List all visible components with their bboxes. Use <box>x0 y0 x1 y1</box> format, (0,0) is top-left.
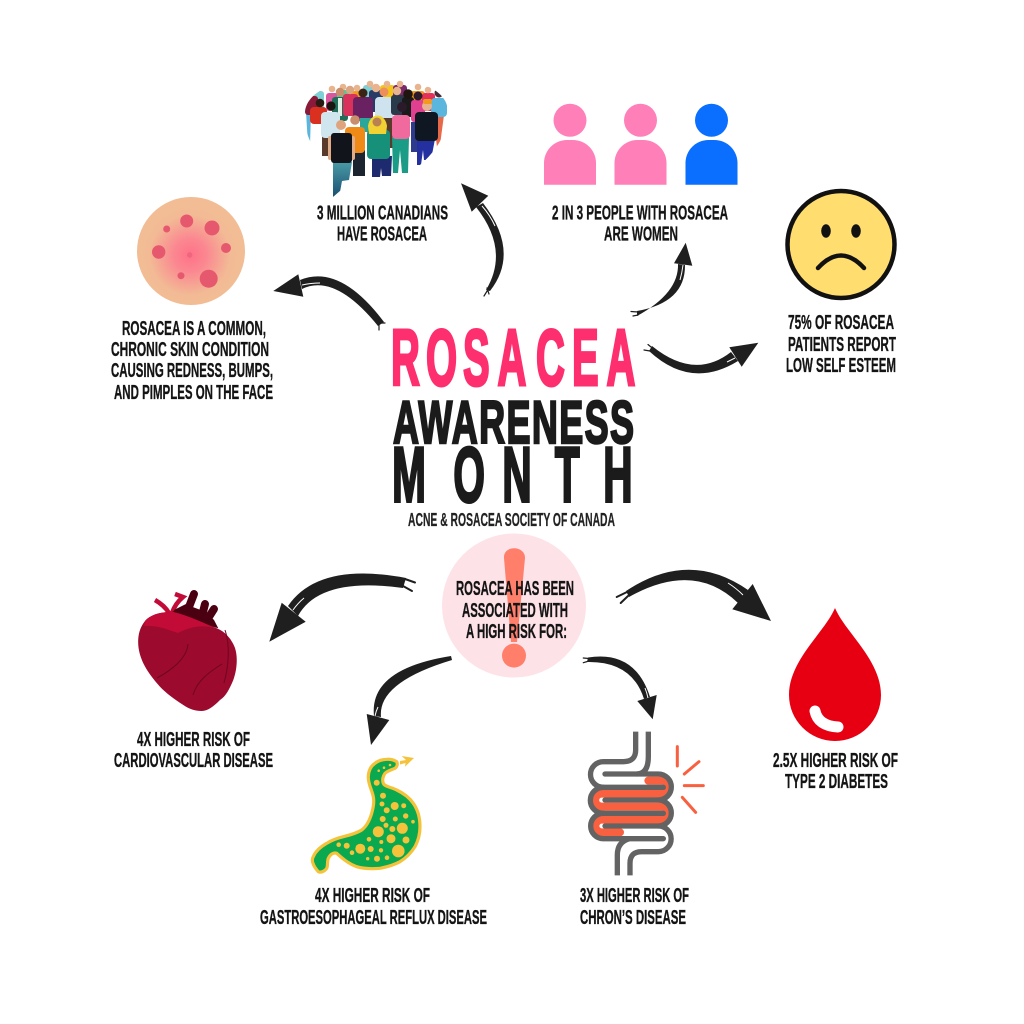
text: cardiovascular risk: CARDIOVASCULAR DISEASE <box>114 749 273 772</box>
text: skin condition description: CAUSING REDNESS, BUMPS, <box>111 359 273 382</box>
icon: sad face <box>788 191 894 298</box>
icon: intestine <box>590 732 703 875</box>
text: reflux risk: 4X HIGHER RISK OF <box>315 884 430 907</box>
title word: MONTH: MONTH <box>392 432 632 519</box>
text: skin condition description <box>111 317 273 404</box>
text: 2 in 3 people are women <box>552 202 728 246</box>
text: 75 percent low self esteem: 75% OF ROSACEA <box>788 311 894 334</box>
text: diabetes risk: 2.5X HIGHER RISK OF <box>773 749 898 772</box>
text: 3 million Canadians: HAVE ROSACEA <box>337 222 427 246</box>
arrow: to heart <box>269 574 415 642</box>
text: cardiovascular risk: 4X HIGHER RISK OF <box>137 728 250 751</box>
text: 75 percent low self esteem <box>786 311 896 377</box>
arrow: to intestine <box>583 656 657 719</box>
panel: skin condition icon <box>137 197 245 305</box>
arrow: to crowd <box>461 183 504 296</box>
callout: associated high risk circle <box>442 534 586 678</box>
text: diabetes risk <box>773 749 898 793</box>
title word: AWARENESS: AWARENESS <box>393 390 635 456</box>
arrow: to skin condition <box>273 274 385 330</box>
icon: blood drop <box>789 608 881 741</box>
text: 3 million Canadians: 3 MILLION CANADIANS <box>317 202 448 224</box>
text: cardiovascular risk <box>114 728 273 772</box>
callout: associated high risk circle: ASSOCIATED WITH <box>462 599 568 622</box>
text: skin condition description: AND PIMPLES ON THE FACE <box>114 381 273 404</box>
text: 75 percent low self esteem: LOW SELF ESTEEM <box>786 354 896 377</box>
arrow: to sad face <box>644 343 758 373</box>
title: Rosacea Awareness Month <box>391 314 635 530</box>
text: 2 in 3 people are women: ARE WOMEN <box>604 222 678 246</box>
callout: associated high risk circle: A HIGH RISK FOR: <box>466 620 567 643</box>
title word: ROSACEA: ROSACEA <box>391 314 635 403</box>
text: reflux risk: GASTROESOPHAGEAL REFLUX DISEASE <box>260 906 487 929</box>
text: reflux risk <box>260 884 487 929</box>
arrow: to women icon <box>631 243 692 316</box>
text: Crohn's risk: 3X HIGHER RISK OF <box>580 884 689 907</box>
callout: associated high risk circle: ROSACEA HAS BEEN <box>456 577 574 600</box>
arrow: to stomach <box>367 656 452 745</box>
icon: stomach <box>312 756 420 872</box>
text: Crohn's risk: CHRON’S DISEASE <box>580 906 686 929</box>
arrow: to blood drop <box>617 570 771 621</box>
icon: crowd of people in speech bubble <box>305 81 447 197</box>
text: skin condition description: ROSACEA IS A COMMON, <box>122 317 266 340</box>
text: Crohn's risk <box>580 884 689 929</box>
text: skin condition description: CHRONIC SKIN CONDITION <box>111 338 269 361</box>
icon: heart <box>138 594 237 711</box>
text: diabetes risk: TYPE 2 DIABETES <box>785 770 888 793</box>
icon: two women and one man <box>544 104 738 185</box>
text: 75 percent low self esteem: PATIENTS REPORT <box>788 333 896 356</box>
text: 2 in 3 people are women: 2 IN 3 PEOPLE WITH ROSACEA <box>552 202 728 224</box>
subtitle: society name: ACNE & ROSACEA SOCIETY OF CANADA <box>408 509 615 530</box>
text: 3 million Canadians <box>317 202 448 246</box>
